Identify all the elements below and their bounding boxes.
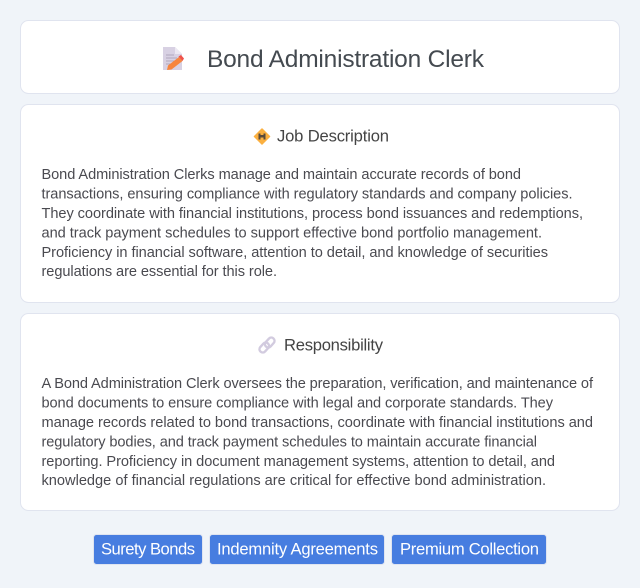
tag: premium collection [392, 534, 546, 564]
text block: job description: Proficiency in financial software, attention to detail, and knowledge of securities [42, 245, 548, 261]
title: Bond Administration Clerk [207, 46, 485, 73]
heading: responsibility: Responsibility [284, 336, 384, 354]
text block: job description [42, 167, 583, 280]
panel: job description [20, 104, 620, 302]
text block: job description: regulations are essential for this role. [42, 264, 277, 280]
panel: title header [20, 20, 620, 94]
text block: responsibility: bond documents to ensure compliance with legal and corporate standards. They [42, 396, 554, 412]
text block: responsibility: reporting. Proficiency in document management systems, attention to detail, and [42, 454, 555, 470]
icon: chain link [258, 336, 276, 354]
text block: job description: Bond Administration Clerks manage and maintain accurate records of bond [42, 167, 521, 183]
text block: responsibility: manage records related to bond transactions, coordinate with financial institutions and [42, 415, 593, 431]
heading: job description: Job Description [277, 126, 389, 146]
tag: surety bonds: Surety Bonds [101, 540, 195, 558]
text block: responsibility: regulatory bodies, and track payment schedules to maintain accurate financial [42, 434, 537, 450]
tag: surety bonds [94, 534, 202, 564]
text block: responsibility [42, 376, 594, 489]
icon: diamond sign [254, 129, 270, 144]
tag: premium collection: Premium Collection [400, 540, 539, 558]
tag: indemnity agreements [210, 534, 384, 564]
panel: responsibility [20, 314, 620, 510]
text block: job description: They coordinate with financial institutions, process bond issuances and redemptions, [42, 206, 583, 222]
text block: job description: transactions, ensuring compliance with regulatory standards and company policies. [42, 186, 572, 202]
text block: responsibility: A Bond Administration Clerk oversees the preparation, verification, and maintenance of [42, 376, 594, 392]
tag: indemnity agreements: Indemnity Agreements [217, 540, 378, 558]
text block: job description: and track payment schedules to support effective bond portfolio management. [42, 226, 542, 242]
text block: responsibility: knowledge of financial regulations are critical for effective bond administration. [42, 473, 546, 489]
icon: document with pencil [163, 47, 184, 70]
